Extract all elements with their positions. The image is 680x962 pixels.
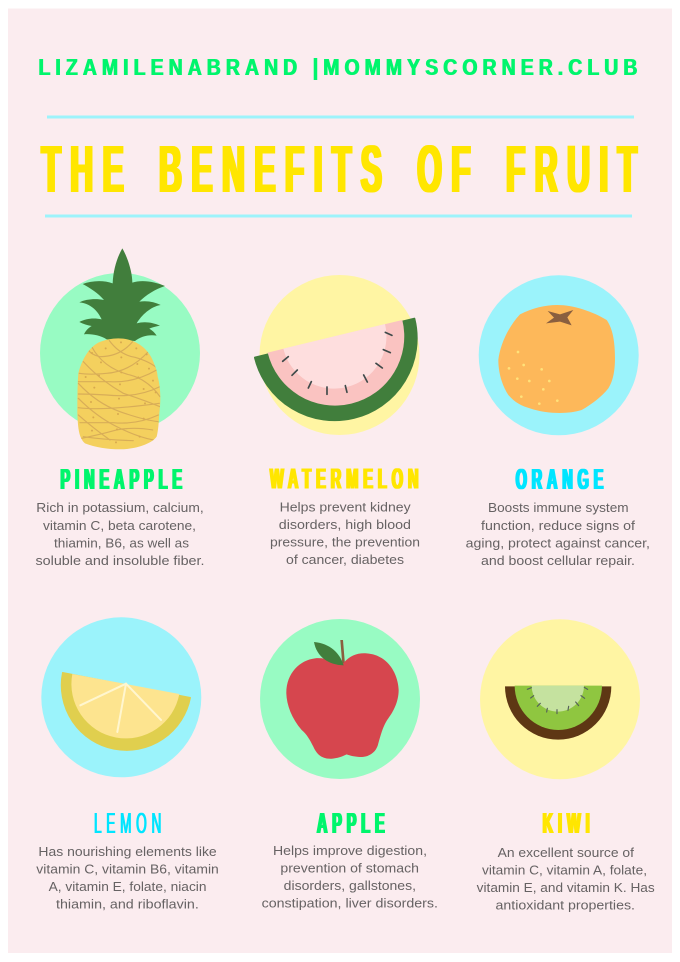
- text: apple benefits: [262, 843, 438, 910]
- panel: orange: [466, 275, 650, 568]
- text: lemon benefits: thiamin, and riboflavin.: [56, 896, 199, 912]
- panel: apple: [260, 619, 438, 910]
- text: watermelon benefits: pressure, the prevention: [270, 534, 420, 550]
- text: lemon benefits: A, vitamin E, folate, niacin: [49, 879, 206, 894]
- icon: watermelon: [255, 275, 420, 435]
- panel: kiwi: KIWI: [543, 808, 595, 840]
- text: orange benefits: Boosts immune system: [488, 500, 629, 515]
- text: watermelon benefits: Helps prevent kidney: [280, 500, 411, 514]
- icon: apple: [260, 619, 420, 779]
- text: orange benefits: function, reduce signs of: [481, 518, 635, 533]
- text: apple benefits: disorders, gallstones,: [284, 878, 416, 893]
- text: pineapple benefits: [36, 500, 204, 568]
- text: orange benefits: and boost cellular repair.: [481, 553, 635, 568]
- text: lemon benefits: [36, 844, 219, 912]
- text: kiwi benefits: vitamin C, vitamin A, folate,: [482, 862, 647, 878]
- text: watermelon benefits: [270, 500, 420, 567]
- text: watermelon benefits: of cancer, diabetes: [286, 552, 405, 567]
- text: kiwi benefits: vitamin E, and vitamin K. Has: [477, 880, 655, 895]
- panel: watermelon: [255, 275, 424, 567]
- icon: orange: [479, 275, 639, 435]
- infographic: WATERMELON: [270, 464, 424, 496]
- text: pineapple benefits: soluble and insoluble fiber.: [36, 553, 204, 568]
- text: lemon benefits: vitamin C, vitamin B6, vitamin: [36, 862, 219, 876]
- icon: kiwi: [480, 619, 640, 779]
- text: apple benefits: constipation, liver disorders.: [262, 896, 438, 910]
- panel: lemon: [36, 617, 219, 912]
- text: kiwi benefits: An excellent source of: [498, 845, 634, 860]
- text: pineapple benefits: vitamin C, beta carotene,: [43, 518, 196, 533]
- text: apple benefits: prevention of stomach: [280, 860, 419, 876]
- panel: kiwi: [477, 619, 655, 912]
- panel: pineapple: [36, 248, 204, 568]
- text: orange benefits: aging, protect against cancer,: [466, 536, 650, 550]
- icon: lemon: [41, 617, 201, 777]
- text: kiwi benefits: antioxidant properties.: [496, 898, 635, 912]
- panel: apple: APPLE: [317, 808, 390, 840]
- text: pineapple benefits: Rich in potassium, calcium,: [36, 500, 204, 515]
- text: orange benefits: [466, 500, 650, 568]
- text: apple benefits: Helps improve digestion,: [273, 843, 427, 858]
- icon: pineapple: [40, 248, 200, 449]
- text: watermelon benefits: disorders, high blood: [279, 517, 411, 532]
- text: lemon benefits: Has nourishing elements like: [38, 844, 217, 859]
- text: kiwi benefits: [477, 845, 655, 912]
- text: pineapple benefits: thiamin, B6, as well as: [54, 536, 190, 550]
- panel: lemon: LEMON: [94, 808, 166, 840]
- panel: pineapple: PINEAPPLE: [60, 464, 187, 496]
